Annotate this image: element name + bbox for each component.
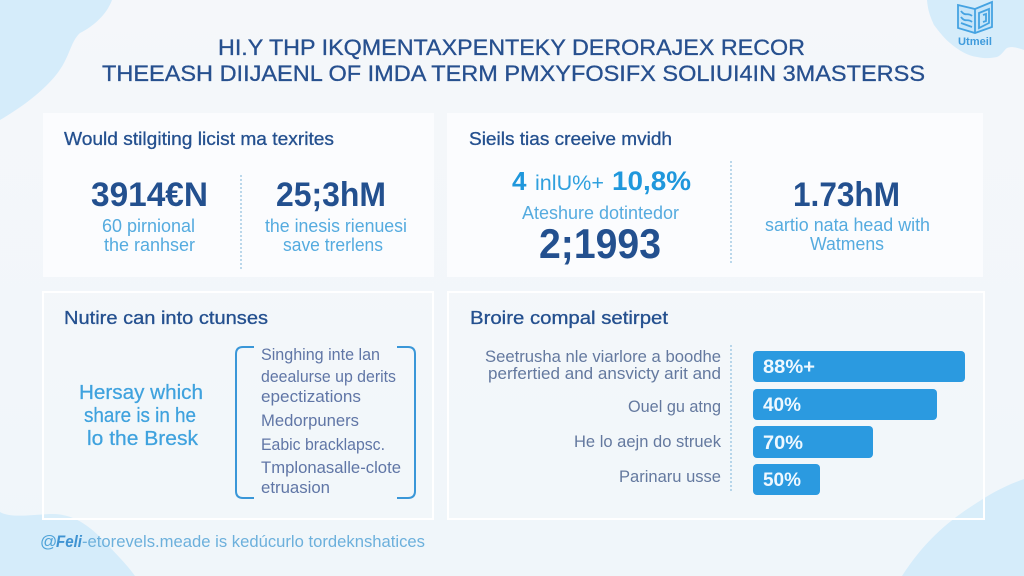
footer note: -etorevels.meade is kedúcurlo tordeknshatices xyxy=(82,532,425,551)
bar labels xyxy=(485,347,721,486)
stat: right: 25;3hM xyxy=(276,176,386,214)
bar 1: 88%+ xyxy=(763,357,815,378)
title: THEEASH DIIJAENL OF IMDA TERM PMXYFOSIFX SOLIUI4IN 3MASTERSS xyxy=(102,61,925,86)
blob: bottom left xyxy=(0,512,135,576)
stat: percent range: Ateshure dotintedor xyxy=(522,203,679,223)
list: epectizations xyxy=(261,387,361,406)
bar chart xyxy=(753,351,965,495)
footer note: Feli xyxy=(56,532,83,551)
callout text: lo the Bresk xyxy=(87,428,199,450)
list: deealurse up derits xyxy=(261,367,396,386)
stat: right xyxy=(765,176,930,254)
stat: left: the ranhser xyxy=(104,235,195,255)
panel: bottom right xyxy=(448,292,984,519)
stat: right: sartio nata head with xyxy=(765,215,930,235)
heading: Broire compal setirpet xyxy=(470,308,668,328)
bar labels: He lo aejn do struek xyxy=(574,432,721,451)
stat: percent range: inlU%+ xyxy=(535,172,604,195)
bar labels: Ouel gu atng xyxy=(628,397,721,416)
bar labels: Seetrusha nle viarlore a boodhe xyxy=(485,347,721,366)
stat: right: 1.73hM xyxy=(793,176,900,214)
list: Eabic bracklapsc. xyxy=(261,435,385,454)
panel: bottom left xyxy=(43,292,433,519)
stat: percent range xyxy=(512,166,691,267)
blob: top left xyxy=(0,0,112,120)
list: Tmplonasalle-clote xyxy=(261,458,401,477)
title: HI.Y THP IKQMENTAXPENTEKY DERORAJEX RECOR xyxy=(218,35,805,60)
heading: Would stilgiting licist ma texrites xyxy=(64,129,334,149)
bar labels: perfertied and ansvicty arit and xyxy=(488,364,721,383)
callout text xyxy=(79,382,203,450)
bracket: right xyxy=(397,347,415,498)
title xyxy=(102,35,925,86)
stat: left: 60 pirnional xyxy=(102,216,195,236)
callout text: Hersay which xyxy=(79,382,203,404)
stat: right xyxy=(265,176,407,255)
heading: Nutire can into ctunses xyxy=(64,308,268,328)
stat: left: 3914€N xyxy=(91,176,208,214)
list: Singhing inte lan xyxy=(261,345,380,364)
heading: Sieils tias creeive mvidh xyxy=(469,129,672,149)
logo xyxy=(958,2,992,48)
blob: bottom right xyxy=(902,479,1024,576)
stat: right: the inesis rienuesi xyxy=(265,216,407,236)
bar 4 xyxy=(753,464,820,495)
panel: top right xyxy=(447,113,983,277)
stat: percent range: 4 xyxy=(512,166,527,196)
bracket: left xyxy=(236,347,254,498)
stat: right: save trerlens xyxy=(283,235,383,255)
icon: box building xyxy=(958,2,992,33)
logo label: Utmeil xyxy=(958,36,992,48)
list xyxy=(261,345,401,497)
bar 2 xyxy=(753,389,937,420)
bar labels: Parinaru usse xyxy=(619,467,721,486)
stat: percent range: 10,8% xyxy=(612,166,691,196)
blob: top right xyxy=(927,0,1024,58)
list: Medorpuners xyxy=(261,411,359,430)
bar 3: 70% xyxy=(763,433,803,454)
bar 4: 50% xyxy=(763,470,801,491)
bar 1 xyxy=(753,351,965,382)
footer note: @ xyxy=(40,532,57,551)
panel: top left xyxy=(43,113,434,277)
bar 3 xyxy=(753,426,873,458)
list: etruasion xyxy=(261,478,330,497)
stat: right: Watmens xyxy=(810,234,884,254)
callout text: share is in he xyxy=(84,405,196,427)
stat: percent range: 2;1993 xyxy=(539,220,661,267)
stat: left xyxy=(91,176,208,255)
bar 2: 40% xyxy=(763,395,801,416)
